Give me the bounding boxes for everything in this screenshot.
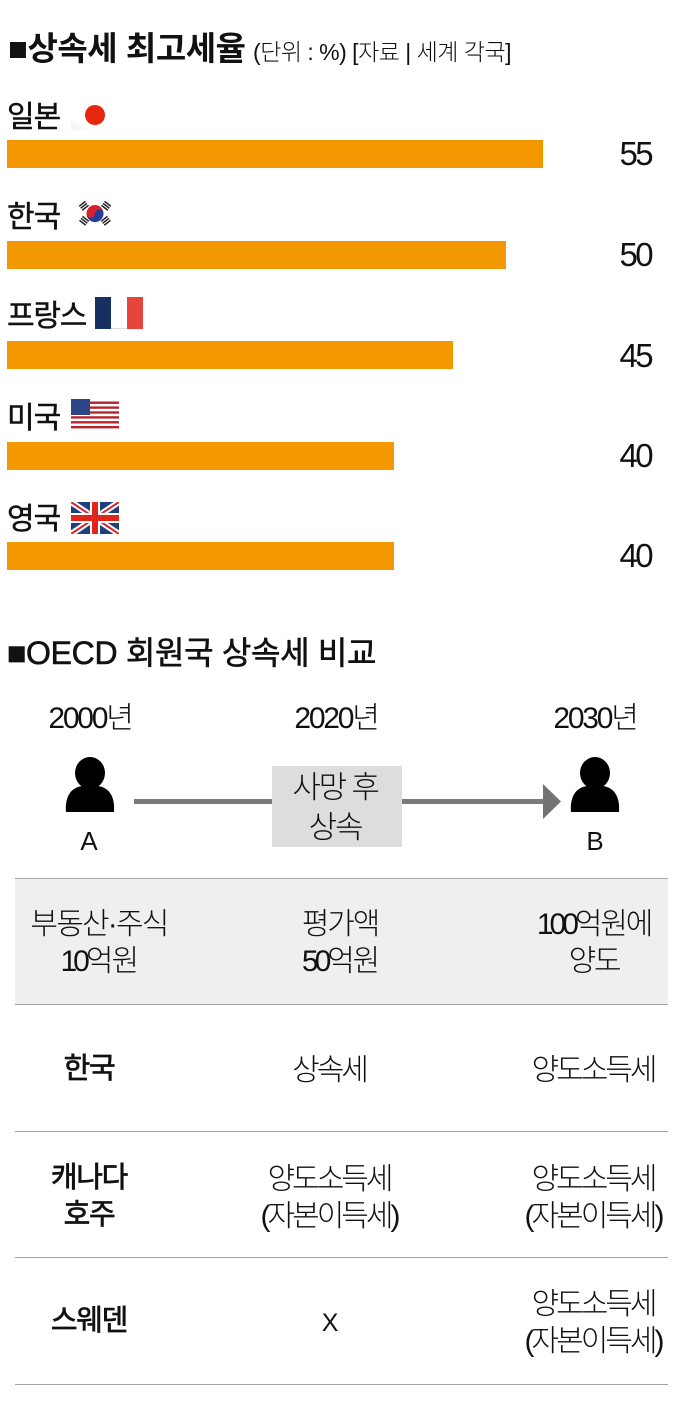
label: France: 프랑스 (7, 300, 86, 333)
label: A: A (80, 826, 98, 856)
cell: inheritance tax: 상속세 (292, 1054, 366, 1087)
bar: Japan 55 (7, 140, 543, 168)
table: value row (15, 878, 668, 1005)
year: 2030: 2030년 (553, 702, 637, 735)
bar: UK 40 (7, 542, 394, 570)
value: 45: 45 (619, 337, 651, 374)
cell: capital gains tax: 양도소득세 (268, 1163, 390, 1196)
cell: asset: 부동산·주식 (30, 908, 168, 941)
timeline diagram (48, 702, 637, 856)
table row: Canada, Australia (15, 1162, 668, 1258)
icon: USA flag (71, 399, 119, 428)
label: B: B (586, 826, 604, 856)
cell: valuation: 50억원 (302, 945, 378, 978)
value: 50: 50 (619, 236, 651, 273)
cell: capital gains tax (260, 1163, 399, 1233)
icon: Japan flag (71, 105, 105, 130)
row label: Canada, Australia: 캐나다 (51, 1162, 127, 1194)
cell: valuation (302, 908, 378, 978)
cell: capital gains tax: (자본이득세) (524, 1200, 661, 1233)
arrow: timeline (134, 784, 561, 819)
label: UK: 영국 (7, 503, 60, 536)
label: Korea: 한국 (7, 201, 60, 234)
heading: OECD comparison: ■OECD 회원국 상속세 비교 (7, 635, 376, 671)
box text: 사망 후 (292, 770, 378, 805)
row label: Canada, Australia: 호주 (64, 1199, 114, 1231)
cell: sale: 양도 (569, 945, 619, 978)
value: 40: 40 (619, 437, 651, 474)
row label: Canada, Australia (51, 1162, 128, 1231)
bar: France 45 (7, 341, 453, 369)
row label: Korea: 한국 (64, 1053, 114, 1085)
cell: valuation: 평가액 (302, 908, 378, 941)
cell: asset: 10억원 (60, 945, 137, 978)
title: inheritance tax top rate: ■상속세 최고세율 (단위 : %) [자료 | 세계 각국] (8, 30, 511, 67)
icon: person A (66, 757, 114, 812)
cell: capital gains tax: 양도소득세 (532, 1163, 654, 1196)
label: USA: 미국 (7, 402, 60, 435)
box text: 상속 (309, 810, 361, 845)
bar: USA 40 (7, 442, 394, 470)
table row: Sweden (15, 1288, 668, 1385)
cell: asset (30, 908, 168, 978)
icon: UK flag (71, 502, 119, 534)
icon: Korea flag (78, 200, 112, 226)
bar chart: top rates by country (7, 101, 652, 574)
box text (292, 770, 378, 845)
table row: Korea (15, 1053, 668, 1132)
cell: capital gains tax: (자본이득세) (524, 1325, 661, 1358)
bar: Korea 50 (7, 241, 506, 269)
box: after death inheritance (272, 766, 402, 847)
icon: France flag (95, 297, 143, 329)
cell: capital gains tax: 양도소득세 (532, 1288, 654, 1321)
value: 40: 40 (619, 537, 651, 574)
value: 55: 55 (619, 135, 651, 172)
icon: person B (570, 757, 620, 812)
year: 2000: 2000년 (48, 702, 132, 735)
year: 2020: 2020년 (294, 702, 378, 735)
cell: capital gains tax: 양도소득세 (532, 1054, 654, 1087)
cell: capital gains tax: (자본이득세) (260, 1200, 397, 1233)
cell: sale (537, 908, 651, 978)
cell: capital gains tax (524, 1288, 663, 1358)
label: Japan: 일본 (7, 101, 60, 134)
row label: Sweden: 스웨덴 (51, 1305, 127, 1337)
cell: none: X (322, 1309, 336, 1337)
cell: sale: 100억원에 (537, 908, 651, 941)
cell: capital gains tax (524, 1163, 663, 1233)
